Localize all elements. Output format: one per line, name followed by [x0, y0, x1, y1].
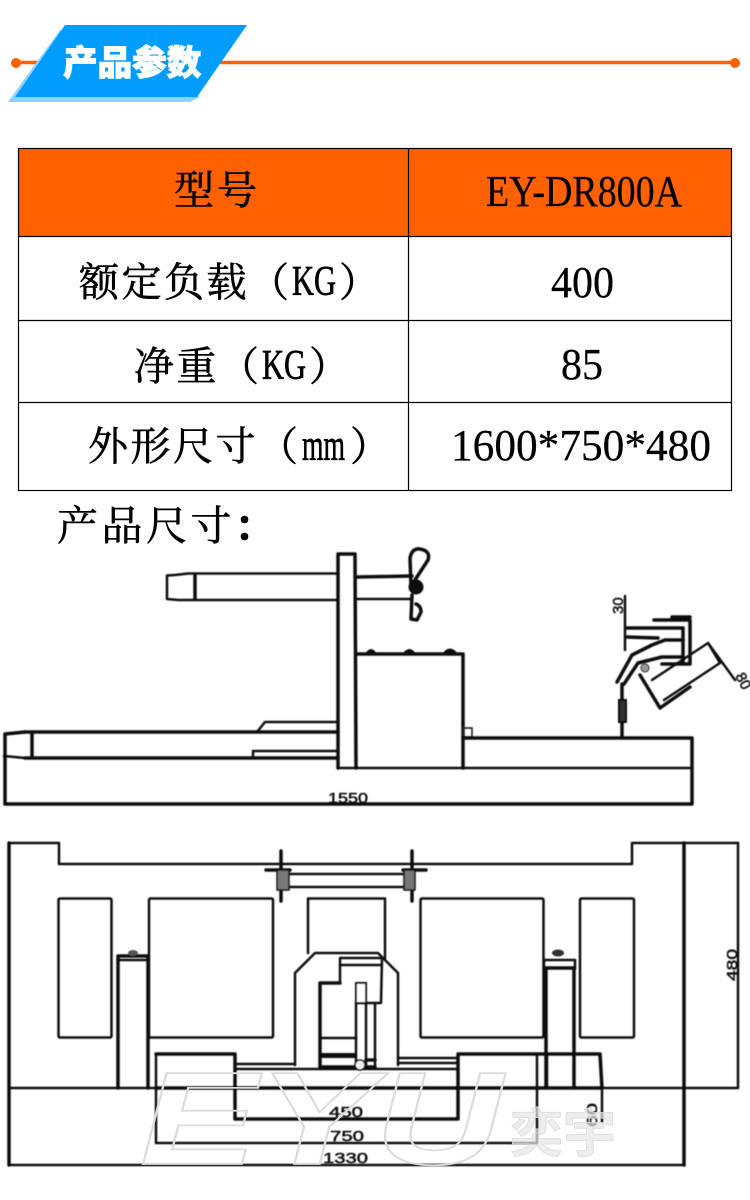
specification table: EY-DR800A	[486, 167, 682, 216]
dimension: 30: 30	[610, 597, 627, 614]
specification table: KG	[262, 343, 306, 389]
battery box	[357, 648, 472, 768]
specification table: ）	[350, 424, 390, 469]
specification table: 400	[551, 258, 614, 307]
specification table: 外形尺寸（	[88, 424, 300, 469]
side view technical drawing	[4, 549, 750, 807]
axle rollers	[266, 851, 426, 901]
side posts	[118, 950, 575, 1088]
specification table: KG	[292, 259, 336, 305]
specification table	[18, 148, 732, 490]
fork slots and lower blocks	[156, 1054, 602, 1143]
specification table: ）	[309, 344, 349, 389]
heading: 产品尺寸: 产品尺寸：	[57, 503, 280, 549]
watermark: EYU 奕宇: 奕宇	[510, 1106, 616, 1164]
watermark: EYU 奕宇	[140, 1045, 616, 1192]
mast	[338, 554, 356, 768]
upper fork arm	[167, 574, 412, 600]
specification table: 净重（	[134, 344, 262, 389]
specification table: 型号	[174, 168, 260, 213]
specification table: 1600*750*480	[451, 421, 711, 470]
center drive housing	[295, 953, 398, 1070]
dimension: 480: 480	[724, 949, 741, 981]
section header: 产品参数: 产品参数	[63, 44, 202, 83]
watermark: EYU 奕宇: EYU	[140, 1045, 507, 1192]
top view technical drawing	[9, 843, 741, 1167]
specification table: 额定负载（	[79, 260, 292, 305]
specification table: mm	[302, 421, 345, 470]
dimension: 1550: 1550	[328, 790, 368, 807]
hook knob	[408, 549, 429, 620]
window openings	[58, 898, 634, 1038]
dimension: 60: 60	[584, 1103, 601, 1127]
section header: 产品参数	[8, 25, 740, 102]
lower fork and base	[4, 722, 692, 804]
dimension: 1330: 1330	[323, 1150, 368, 1167]
clamp detail	[617, 596, 735, 736]
dimension: 450: 450	[329, 1104, 363, 1121]
outer frame	[9, 843, 738, 1165]
dimension: 750: 750	[330, 1128, 364, 1145]
specification table: 85	[561, 340, 603, 389]
specification table: ）	[339, 260, 379, 305]
